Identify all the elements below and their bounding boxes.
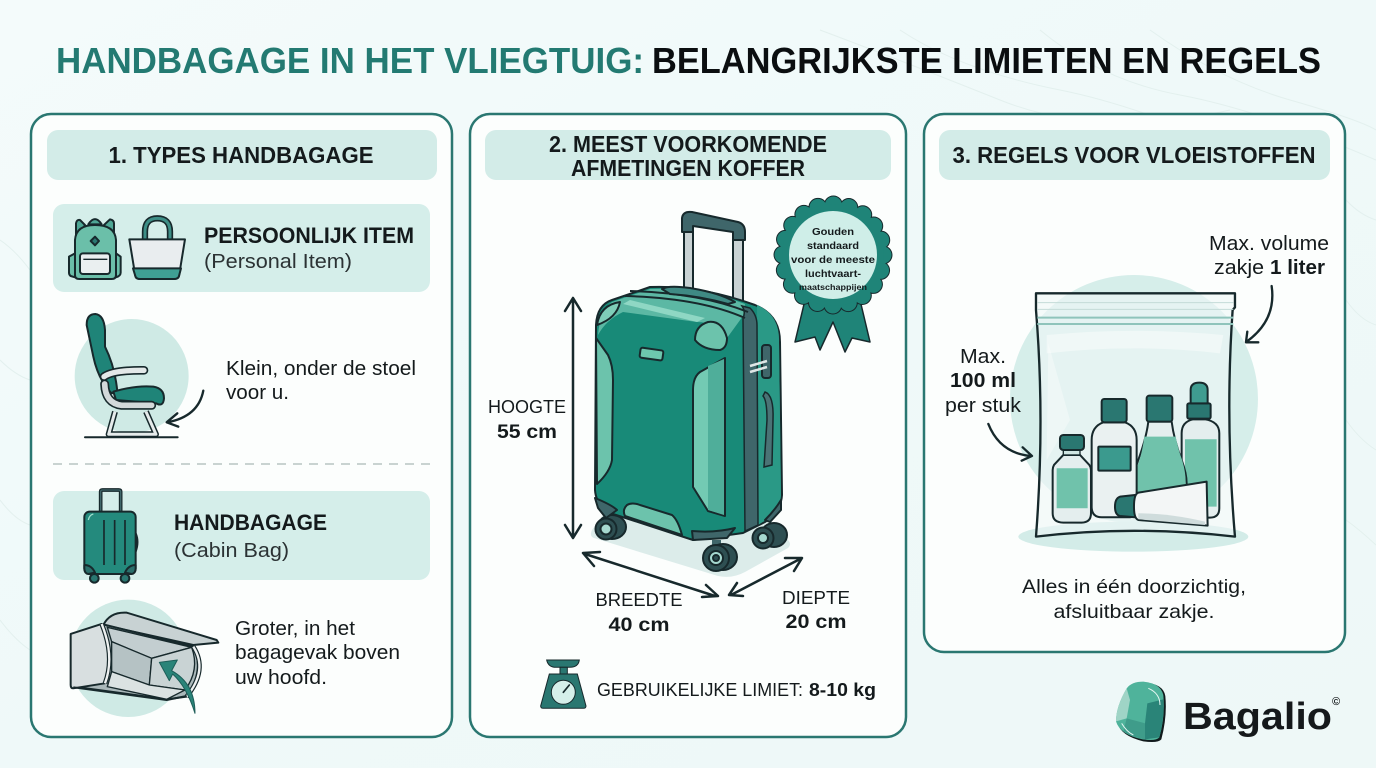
panel: regels voor vloeistoffen [924, 114, 1345, 652]
heading: types handbagage [47, 130, 437, 180]
text: max volume [1209, 233, 1329, 279]
text: persoonlijk item: PERSOONLIJK ITEM [204, 223, 414, 248]
text: max volume: Max. volume [1209, 233, 1329, 255]
text: klein onder de stoel: Klein, onder de stoel [226, 358, 416, 380]
illustration: liquids bag [1010, 275, 1258, 552]
text: gebruikelijke limiet: 8-10 kg [809, 679, 876, 700]
icon: backpack [69, 219, 121, 279]
text: max volume: 1 liter [1270, 257, 1325, 279]
badge: gouden standaard: standaard [807, 240, 859, 252]
bottle: tall [1133, 396, 1187, 500]
icon: tote bag [129, 218, 185, 279]
text: groter in het bagagevak: bagagevak boven [235, 642, 400, 664]
arrow: depth [729, 558, 802, 596]
heading: afmetingen koffer: 2. MEEST VOORKOMENDE [549, 131, 827, 157]
text: handbagage: HANDBAGAGE [174, 510, 327, 535]
text: max 100 ml: 100 ml [950, 370, 1016, 392]
heading: regels voor vloeistoffen: 3. REGELS VOOR VLOEISTOFFEN [952, 142, 1316, 168]
text: hoogte: 55 cm [497, 422, 557, 443]
text: breedte: BREEDTE [596, 590, 682, 610]
text: diepte: 20 cm [786, 612, 846, 633]
title [56, 40, 1321, 81]
text: groter in het bagagevak [235, 618, 400, 689]
icon: logo gem [1116, 682, 1166, 742]
text: alles in een zakje: afsluitbaar zakje. [1054, 601, 1214, 623]
badge: gouden standaard [782, 204, 884, 352]
arrow: width [583, 552, 718, 597]
text: breedte [596, 590, 682, 636]
icon: cabin bag [84, 490, 137, 583]
text: max 100 ml [945, 346, 1022, 417]
tube [1115, 482, 1208, 526]
text: diepte [782, 588, 850, 633]
text: personal item: (Personal Item) [204, 251, 352, 273]
bottle: small [1053, 435, 1091, 523]
title: BELANGRIJKSTE LIMIETEN EN REGELS [652, 40, 1321, 81]
text: groter in het bagagevak: uw hoofd. [235, 667, 327, 689]
text: hoogte [488, 397, 566, 443]
badge: gouden standaard: Gouden [812, 226, 854, 238]
bottle: labelled [1092, 399, 1137, 517]
arrow: to bag top [1246, 286, 1272, 342]
text: gebruikelijke limiet: GEBRUIKELIJKE LIMIET: [597, 680, 803, 700]
arrow: to bottles [988, 424, 1032, 461]
icon: copyright mark: © [1332, 696, 1340, 708]
illustration: overhead bin [70, 600, 218, 717]
panel: afmetingen koffer [470, 114, 906, 737]
text: klein onder de stoel [226, 358, 416, 404]
badge: gouden standaard: voor de meeste [791, 254, 875, 266]
heading: afmetingen koffer: AFMETINGEN KOFFER [571, 155, 805, 181]
text: hoogte: HOOGTE [488, 397, 566, 417]
illustration: suitcase [591, 212, 790, 577]
panel: types handbagage [31, 114, 452, 737]
text: max 100 ml: per stuk [945, 395, 1022, 417]
text: diepte: DIEPTE [782, 588, 850, 608]
heading: afmetingen koffer [485, 130, 891, 181]
text: max volume: zakje [1214, 257, 1264, 279]
heading: types handbagage: 1. TYPES HANDBAGAGE [108, 142, 374, 168]
text: alles in een zakje [1022, 576, 1246, 623]
icon: scale [541, 660, 586, 708]
text: breedte: 40 cm [608, 615, 670, 636]
badge: gouden standaard: maatschappijen [799, 282, 867, 292]
heading: regels voor vloeistoffen [939, 130, 1330, 180]
text: cabin bag: (Cabin Bag) [174, 540, 289, 562]
illustration: seat [75, 314, 189, 437]
badge: gouden standaard: luchtvaart- [805, 268, 862, 280]
title: HANDBAGAGE IN HET VLIEGTUIG: [56, 40, 644, 81]
bottle: spray [1182, 383, 1219, 518]
row: persoonlijk item [53, 204, 430, 292]
text: klein onder de stoel: voor u. [226, 382, 289, 404]
text: alles in een zakje: Alles in één doorzichtig, [1022, 576, 1246, 598]
row: handbagage [53, 490, 430, 583]
text: groter in het bagagevak: Groter, in het [235, 618, 355, 640]
arrow: height [565, 298, 581, 538]
arrow: under seat [167, 391, 203, 427]
text: bagalio wordmark: Bagalio [1183, 696, 1332, 738]
logo: bagalio [1116, 682, 1340, 742]
text: max 100 ml: Max. [960, 346, 1006, 368]
